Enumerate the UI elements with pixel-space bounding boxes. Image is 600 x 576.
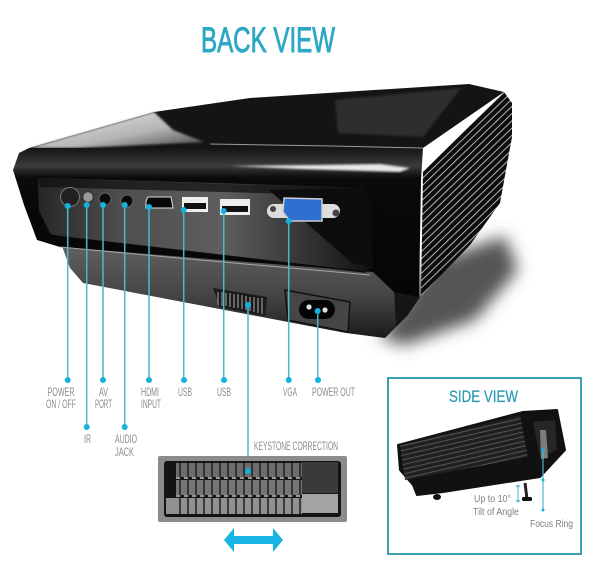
front face bbox=[13, 148, 423, 297]
HDMI port bbox=[146, 197, 173, 208]
drop shadow bbox=[380, 236, 518, 345]
port labels: JACK bbox=[115, 445, 134, 459]
focus ring callout bbox=[541, 448, 545, 512]
top edge highlight bbox=[210, 144, 423, 148]
USB port 2 bbox=[220, 199, 250, 215]
tilt foot bbox=[522, 483, 532, 501]
top surface grey reflection bbox=[335, 88, 461, 137]
projector back view photo bbox=[13, 84, 518, 345]
keystone grille bbox=[213, 288, 267, 316]
port labels: INPUT bbox=[141, 397, 161, 411]
side vents bbox=[400, 415, 528, 480]
panel top shade bbox=[38, 178, 367, 196]
port labels: POWER OUT bbox=[312, 385, 355, 399]
power button bbox=[60, 188, 80, 206]
double arrow bbox=[224, 528, 283, 552]
power inlet bbox=[285, 290, 350, 332]
side projector body bbox=[398, 410, 565, 495]
front highlight streak bbox=[230, 164, 410, 172]
port labels: HDMI bbox=[141, 385, 159, 399]
focus ring bbox=[540, 430, 548, 459]
AV port bbox=[99, 193, 111, 205]
panel frame bbox=[388, 378, 581, 554]
panel dark reflection bbox=[269, 188, 373, 267]
port panel bbox=[37, 177, 373, 272]
keystone dot bbox=[245, 468, 251, 474]
lens cavity bbox=[533, 420, 557, 457]
tilt arrow bbox=[516, 485, 520, 502]
port labels: IR bbox=[84, 432, 91, 446]
USB port 1 bbox=[182, 197, 208, 212]
audio jack bbox=[121, 195, 133, 207]
port labels: VGA bbox=[283, 385, 297, 399]
side view panel bbox=[388, 378, 581, 554]
port labels: AUDIO bbox=[115, 432, 137, 446]
port labels: ON / OFF bbox=[46, 397, 76, 411]
VGA port bbox=[267, 198, 340, 221]
port labels bbox=[46, 385, 355, 459]
port labels: AV bbox=[99, 385, 108, 399]
side view heading: SIDE VIEW bbox=[449, 387, 518, 406]
top surface bbox=[29, 84, 504, 148]
keystone close-up bbox=[158, 456, 347, 522]
focus ring text: Focus Ring bbox=[530, 518, 573, 530]
side vents bbox=[421, 92, 512, 296]
tilt text: Up to 10° bbox=[474, 493, 511, 505]
rear foot bbox=[433, 494, 441, 500]
lower body bbox=[58, 235, 396, 338]
top surface reflection bbox=[29, 112, 204, 148]
tilt text bbox=[473, 493, 519, 518]
IR sensor bbox=[82, 192, 94, 202]
lower trim line bbox=[60, 247, 370, 275]
port labels: POWER bbox=[48, 385, 75, 399]
tilt text: Tilt of Angle bbox=[473, 506, 519, 518]
port labels: KEYSTONE CORRECTION bbox=[254, 439, 338, 453]
port labels: PORT bbox=[95, 397, 112, 411]
lower right recess bbox=[394, 290, 420, 327]
port labels: USB bbox=[217, 385, 231, 399]
title: back view: BACK VIEW bbox=[201, 21, 335, 60]
callout lines and dots bbox=[65, 202, 321, 471]
port labels: USB bbox=[178, 385, 192, 399]
